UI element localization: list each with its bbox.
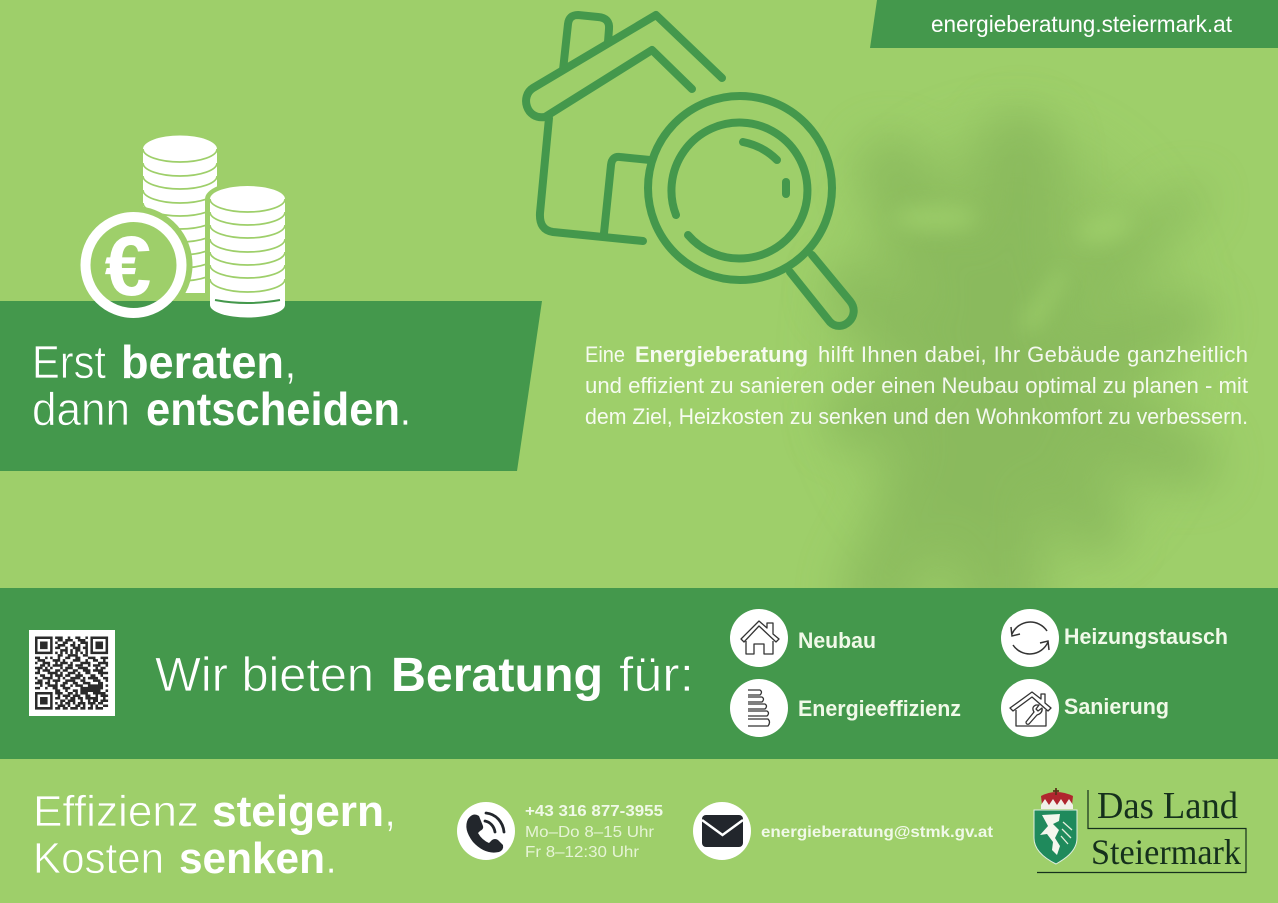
heading: Wir bieten Beratung für: <box>155 649 694 702</box>
icon: coin stacks with euro coin <box>74 136 290 318</box>
intro text block: hilft Ihnen dabei, Ihr Gebäude ganzheitlich <box>818 342 1248 367</box>
slogan: Effizienz steigern, Kosten senken.: . <box>325 834 337 883</box>
headline: Erst beraten, dann entscheiden.: dann <box>32 383 130 435</box>
headline: Erst beraten, dann entscheiden.: beraten <box>121 336 284 388</box>
logo: Das Land Steiermark: Steiermark <box>1091 832 1241 872</box>
intro text block: Energieberatung <box>635 342 808 367</box>
slogan: Effizienz steigern, Kosten senken.: Effizienz <box>33 787 199 836</box>
icon: telephone <box>457 802 515 860</box>
headline: Erst beraten, dann entscheiden.: . <box>399 383 412 435</box>
phone contact text <box>525 803 663 861</box>
heading: Wir bieten Beratung für:: Beratung <box>391 649 603 702</box>
euro coin <box>74 206 192 313</box>
blurred background photo of a plant <box>845 140 1190 600</box>
service: Sanierung: Sanierung <box>1064 694 1169 719</box>
intro text block: Eine <box>585 342 625 367</box>
rear coin stack <box>143 136 217 293</box>
logo wordmark: Das Land <box>1097 785 1238 827</box>
phone contact text: Fr 8–12:30 Uhr <box>525 844 640 861</box>
url banner: energieberatung.steiermark.at <box>931 11 1233 37</box>
slogan: Effizienz steigern, Kosten senken. <box>33 787 396 883</box>
front coin stack <box>205 181 290 318</box>
services band <box>0 588 1278 759</box>
slogan: Effizienz steigern, Kosten senken.: Kosten <box>33 834 164 883</box>
url banner <box>870 0 1278 48</box>
slogan: Effizienz steigern, Kosten senken.: steigern <box>212 787 384 836</box>
heading: Wir bieten Beratung für:: für: <box>619 649 694 702</box>
intro text block <box>585 342 1248 429</box>
slogan: Effizienz steigern, Kosten senken.: , <box>384 787 396 836</box>
coat of arms <box>1034 788 1077 864</box>
euro coin: € <box>105 219 151 313</box>
headline: Erst beraten, dann entscheiden.: entscheiden <box>146 383 400 435</box>
slogan: Effizienz steigern, Kosten senken.: senken <box>179 834 325 883</box>
logo: Das Land Steiermark <box>1034 785 1246 872</box>
headline: Erst beraten, dann entscheiden. <box>32 336 412 435</box>
email address: energieberatung@stmk.gv.at <box>761 824 994 841</box>
icon: house with magnifying glass <box>526 15 854 326</box>
headline: Erst beraten, dann entscheiden.: Erst <box>32 336 106 388</box>
service: Sanierung <box>1001 679 1169 737</box>
service: Heizungstausch: Heizungstausch <box>1064 624 1228 649</box>
heading: Wir bieten Beratung für:: Wir bieten <box>155 649 374 702</box>
QR code <box>29 630 115 716</box>
service: Neubau: Neubau <box>798 628 876 653</box>
service: Energieeffizienz: Energieeffizienz <box>798 696 961 721</box>
logo frame <box>1037 790 1246 872</box>
service: Energieeffizienz <box>730 679 961 737</box>
icon: envelope <box>693 802 751 860</box>
service: Neubau <box>730 609 876 667</box>
intro text block: dem Ziel, Heizkosten zu senken und den Wohnkomfort zu verbessern. <box>585 404 1248 429</box>
intro text block: und effizient zu sanieren oder einen Neubau optimal zu planen - mit <box>585 373 1248 398</box>
phone contact text: +43 316 877-3955 <box>525 803 663 820</box>
phone contact text: Mo–Do 8–15 Uhr <box>525 824 655 841</box>
left headline banner <box>0 301 542 471</box>
headline: Erst beraten, dann entscheiden.: , <box>284 336 297 388</box>
service: Heizungstausch <box>1001 609 1228 667</box>
